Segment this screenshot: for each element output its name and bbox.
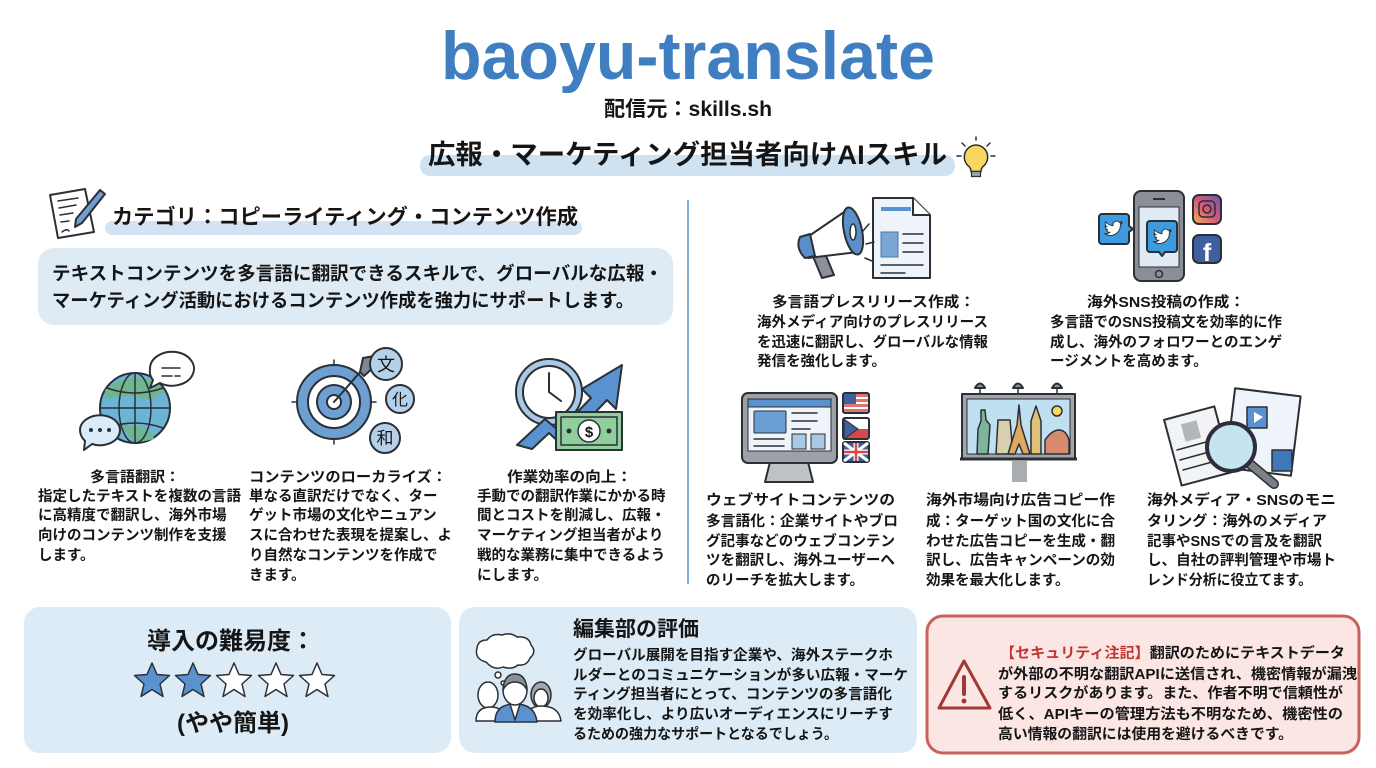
panel: summary: テキストコンテンツを多言語に翻訳できるスキルで、グローバルな広報・: [52, 263, 663, 284]
text: multilingual translation: 向けのコンテンツ制作を支援: [38, 527, 227, 544]
text: press release: を迅速に翻訳し、グローバルな情報: [757, 333, 988, 351]
text: press release: 多言語プレスリリース作成：: [772, 293, 975, 311]
text: ad copy: 成：ターゲット国の文化に合: [926, 512, 1116, 530]
heading: audience: 広報・マーケティング担当者向けAIスキル: [428, 139, 947, 170]
icon: phone with social media: [1099, 191, 1221, 281]
text: localization: きます。: [249, 567, 306, 584]
panel: security warning: 低く、APIキーの管理方法も不明なため、機密性の: [998, 705, 1343, 723]
text: website localization: ツを翻訳し、海外ユーザーへ: [706, 552, 895, 569]
icon: document and pen: [50, 189, 105, 238]
text: monitoring: 記事やSNSでの言及を翻訳: [1147, 532, 1322, 550]
text: monitoring: タリング：海外のメディア: [1147, 512, 1327, 530]
panel: difficulty: [24, 607, 451, 753]
heading: category: [50, 189, 582, 238]
text: localization: り自然なコンテンツを作成で: [249, 546, 438, 564]
text: ad copy: わせた広告コピーを生成・翻: [926, 532, 1115, 550]
icon: Czech flag: [843, 418, 869, 439]
text: monitoring: レンド分析に役立てます。: [1147, 571, 1312, 589]
panel: summary: マーケティング活動におけるコンテンツ作成を強力にサポートします。: [52, 290, 634, 311]
panel: editorial review: 編集部の評価: [573, 618, 699, 641]
icon: US flag: [843, 393, 869, 413]
text: SNS posts: 海外SNS投稿の作成：: [1087, 293, 1245, 311]
text: multilingual translation: 多言語翻訳：: [90, 468, 180, 486]
panel: editorial review: ティング担当者にとって、コンテンツの多言語化: [573, 685, 892, 703]
icon: target with dart and characters: [292, 348, 414, 453]
text: efficiency: 戦的な業務に集中できるよう: [477, 546, 665, 564]
panel: security warning: 高い情報の翻訳には使用を避けるべきです。: [998, 725, 1293, 743]
icon: thought bubble and people: [476, 634, 561, 722]
text: ad copy: 海外市場向け広告コピー作: [926, 491, 1116, 509]
panel: security warning: が外部の不明な翻訳APIに送信され、機密情報が漏洩: [998, 665, 1358, 683]
text: monitoring: し、自社の評判管理や市場ト: [1147, 551, 1336, 569]
text: ad copy: 訳し、広告キャンペーンの効: [926, 551, 1115, 569]
text: SNS posts: [1050, 293, 1282, 370]
text: SNS posts: 多言語でのSNS投稿文を効率的に作: [1050, 313, 1282, 331]
text: ad copy: 効果を最大化します。: [926, 572, 1070, 589]
panel: editorial review: るための強力なサポートとなるでしょう。: [573, 726, 838, 743]
text: SNS posts: 成し、海外のフォロワーとのエンゲ: [1050, 333, 1282, 351]
text: website localization: グ記事などのウェブコンテン: [706, 532, 895, 550]
text: multilingual translation: に高精度で翻訳し、海外市場: [38, 506, 227, 524]
icon: target with dart and characters: 化: [392, 391, 408, 409]
text: press release: 発信を強化します。: [757, 352, 886, 370]
icon: light bulb: [957, 137, 995, 176]
icon: clock, rising arrow and money: $: [585, 424, 594, 441]
text: localization: コンテンツのローカライズ：: [249, 468, 447, 486]
panel: summary: [38, 248, 673, 325]
text: press release: [757, 293, 988, 370]
text: multilingual translation: 指定したテキストを複数の言語: [38, 487, 241, 505]
icon: target with dart and characters: 和: [376, 429, 394, 448]
text: localization: ゲット市場の文化やニュアン: [249, 506, 437, 524]
panel: editorial review: を効率化し、より広いオーディエンスにリーチす: [573, 705, 893, 723]
heading: category: カテゴリ：コピーライティング・コンテンツ作成: [112, 205, 578, 229]
text: efficiency: 手動での翻訳作業にかかる時: [477, 487, 666, 505]
icon: newspapers and magnifying glass: [1164, 388, 1301, 486]
panel: security warning: 【セキュリティ注記】 翻訳のためにテキストデータ: [1000, 644, 1345, 662]
icon: UK flag: [843, 442, 869, 462]
text: press release: 海外メディア向けのプレスリリース: [757, 313, 988, 331]
text: website localization: ウェブサイトコンテンツの: [706, 491, 895, 509]
text: efficiency: 作業効率の向上：: [507, 468, 632, 486]
stars: 2 of 5: [134, 663, 334, 696]
icon: monitor with flags: [742, 393, 869, 482]
panel: difficulty: (やや簡単): [177, 710, 289, 737]
text: monitoring: [1147, 491, 1336, 589]
subtitle: source: 配信元：skills.sh: [604, 98, 772, 121]
icon: target with dart and characters: 文: [377, 355, 395, 375]
icon: globe with speech bubbles: [80, 352, 194, 450]
icon: billboard with world landmarks: [960, 384, 1077, 482]
panel: editorial review: グローバル展開を目指す企業や、海外ステークホ: [573, 646, 893, 664]
text: efficiency: にします。: [477, 567, 548, 584]
panel: editorial review: [459, 607, 917, 753]
text: website localization: のリーチを拡大します。: [706, 571, 864, 589]
icon: phone with social media: f: [1203, 239, 1212, 267]
text: website localization: 多言語化：企業サイトやブロ: [706, 512, 898, 530]
text: efficiency: 間とコストを削減し、広報・: [477, 506, 666, 524]
text: multilingual translation: [38, 468, 241, 564]
panel: editorial review: ルダーとのコミュニケーションが多い広報・マーケ: [573, 666, 908, 684]
icon: megaphone and press release: [798, 198, 930, 278]
text: localization: [249, 468, 452, 584]
text: multilingual translation: します。: [38, 547, 95, 564]
text: localization: 単なる直訳だけでなく、ター: [249, 487, 438, 505]
text: SNS posts: ージメントを高めます。: [1050, 353, 1208, 370]
panel: security warning: するリスクがあります。また、作者不明で信頼性が: [998, 684, 1344, 702]
panel: difficulty: 導入の難易度：: [147, 628, 315, 655]
text: monitoring: 海外メディア・SNSのモニ: [1147, 491, 1336, 509]
text: website localization: [706, 491, 898, 589]
text: efficiency: マーケティング担当者がより: [477, 526, 663, 544]
icon: warning triangle: [939, 661, 990, 708]
panel: security warning: [927, 616, 1359, 753]
text: localization: スに合わせた表現を提案し、よ: [249, 526, 452, 544]
text: ad copy: [926, 491, 1116, 589]
icon: clock, rising arrow and money: [516, 359, 622, 450]
title: baoyu-translate: [441, 18, 935, 94]
text: efficiency: [477, 468, 666, 584]
